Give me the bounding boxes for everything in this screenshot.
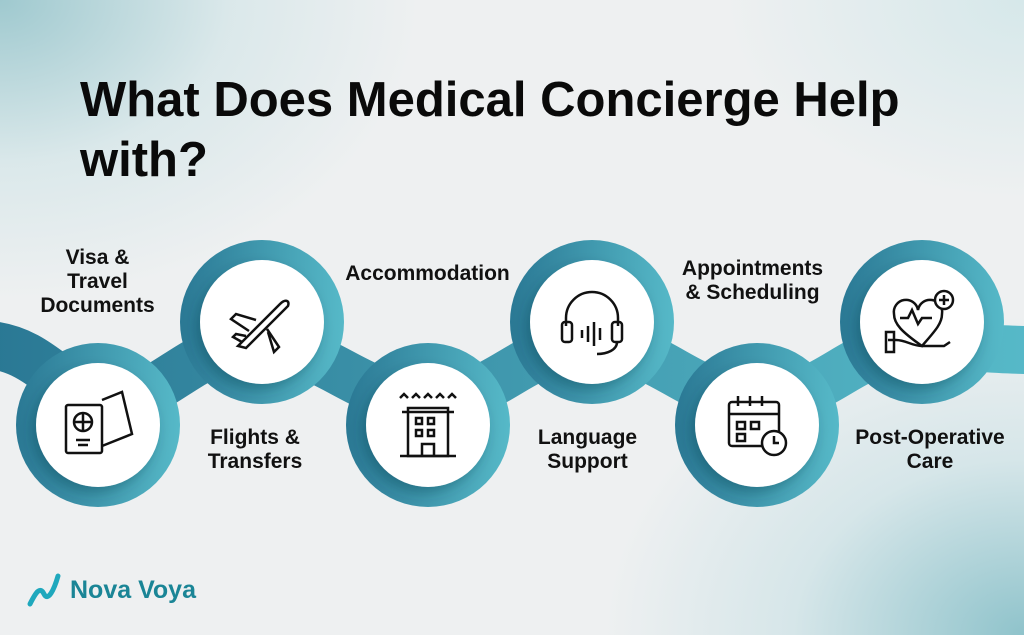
label: Post-Operative Care — [855, 426, 1005, 473]
icon: plane — [231, 301, 288, 352]
label: Language Support — [538, 426, 637, 473]
label: Appointments & Scheduling — [682, 257, 823, 304]
logo: Nova Voya — [70, 576, 196, 604]
label: Post-Operative Care: Care — [907, 450, 953, 473]
label: Appointments & Scheduling: Appointments — [682, 257, 823, 280]
label: Flights & Transfers: Transfers — [208, 450, 302, 473]
label: Flights & Transfers: Flights & — [210, 426, 300, 449]
icon: heart in hand — [886, 291, 953, 352]
icon: calendar — [729, 396, 786, 455]
label: Visa & Travel Documents: Documents — [40, 294, 155, 317]
label: Visa & Travel Documents: Travel — [67, 270, 128, 293]
label: Flights & Transfers — [208, 426, 302, 473]
label: Visa & Travel Documents: Visa & — [66, 246, 129, 269]
icon: hotel — [400, 394, 456, 456]
label: Visa & Travel Documents — [40, 246, 155, 317]
label: Language Support: Support — [547, 450, 628, 473]
icon: passport — [66, 392, 132, 453]
icon: headset — [562, 292, 622, 354]
title: What Does Medical Concierge Help with? — [80, 73, 900, 187]
label: Language Support: Language — [538, 426, 637, 449]
label: Appointments & Scheduling: & Scheduling — [685, 281, 820, 304]
label: Post-Operative Care: Post-Operative — [855, 426, 1005, 449]
label: Accommodation: Accommodation — [345, 262, 510, 285]
logo — [28, 574, 196, 606]
